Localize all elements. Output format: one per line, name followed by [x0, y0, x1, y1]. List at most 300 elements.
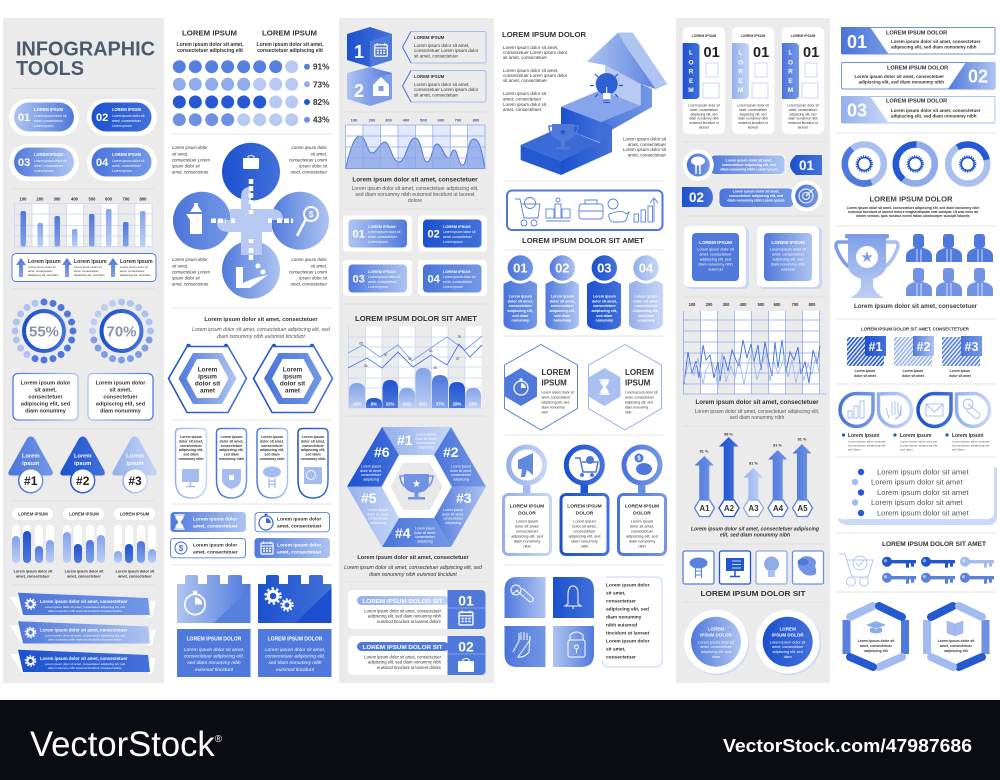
callouts: LOREM IPSUM	[414, 35, 445, 40]
circle text badges: Lorem ipsum dolor sit	[770, 640, 805, 644]
four circle process diagram: sit amet,	[172, 152, 188, 156]
segmented hexagons: amet, consectetuer	[940, 644, 973, 648]
bullet legend	[842, 433, 990, 452]
bullet list card: Lorem ipsum dolor sit amet	[877, 508, 969, 518]
panel: column 5 background	[676, 18, 830, 683]
mini bar charts: amet, consectetuer	[16, 574, 50, 578]
small label pills: Lorem ipsum dolor	[277, 542, 321, 548]
circle text badges: diam	[784, 655, 792, 659]
circle text badges	[684, 610, 821, 675]
angled banners: adipiscing elit, sed diam nonummy nibh	[891, 114, 977, 118]
hexagon six step diagram: #6	[374, 444, 390, 460]
numbered list cards: 02	[458, 638, 474, 654]
numbered cylinders: consectetuer	[593, 304, 616, 308]
bullet legend: Lorem ipsum	[952, 433, 984, 439]
small label pills: $	[179, 544, 184, 553]
title	[16, 38, 155, 80]
circle text badges: amet, consectetuer	[772, 645, 804, 649]
quad icon tiles and text: sit amet,	[606, 646, 626, 652]
small label pills: amet, consectetuer	[277, 550, 322, 556]
chart caption: dolore	[408, 198, 422, 204]
triangles with rank badges: Lorem	[126, 454, 144, 460]
bar chart: 400	[71, 196, 79, 202]
combo bar and line chart: 37%	[436, 402, 444, 406]
mini bar charts: amet, consectetuer	[118, 574, 152, 578]
arrow legend box: adipiscing elit, sed diam	[28, 273, 59, 277]
hexagon six step diagram	[347, 427, 486, 547]
callouts: Lorem ipsum dolor sit amet,	[414, 43, 470, 48]
numbered cylinders: nonummy	[637, 319, 656, 323]
heading pair: LOREM IPSUM	[262, 28, 317, 38]
ribbon banners	[10, 593, 156, 674]
text cards: Lorem ipsum dolor	[96, 380, 146, 386]
inset cards: euismod	[781, 268, 795, 272]
arrow legend box: amet, consectetuer	[28, 269, 53, 273]
four circle process diagram: Lorem ipsum dolor	[172, 145, 208, 150]
numbered cards: Lorem ipsum dolor sit	[443, 275, 475, 279]
arrow legend box: Lorem ipsum dolor sit	[120, 265, 148, 269]
hexagon feature cards: IPSUM	[542, 378, 567, 388]
text cards: sit amet,	[109, 388, 132, 394]
bar chart: 800	[140, 196, 147, 202]
icon: trophy	[549, 124, 578, 150]
isometric stairs with arrow	[521, 33, 667, 175]
four circle process diagram: consectetuer Lorem	[172, 158, 210, 162]
heading and notes: Lorem ipsum dolor sit	[623, 147, 667, 152]
numbered pills: 02	[96, 112, 108, 124]
four circle process diagram: ipsum dolor sit	[299, 276, 328, 280]
numbered pills: amet, consectetuer	[34, 164, 64, 168]
hexagon labels: ipsum	[283, 374, 302, 380]
numbered cylinders: consectetuer	[551, 304, 574, 308]
arrow chart caption	[691, 526, 820, 538]
combo bar and line chart: 65	[359, 342, 363, 346]
hexagon feature cards: amet, consectetuer	[542, 396, 571, 400]
hexagon six step diagram: Lorem ipsum	[416, 432, 436, 436]
heading and notes: Lorem ipsum dolor sit amet,	[503, 45, 559, 50]
panel: column 6	[836, 27, 997, 667]
numbered cylinders: Lorem ipsum	[509, 294, 533, 298]
ribbon banners: Lorem ipsum dolor sit amet, consectetuer	[40, 628, 128, 632]
numbered pills: Lorem ipsum dolor sit	[112, 114, 144, 118]
hexagon caption: diam nonummy nibh euismod tincidunt	[369, 572, 457, 578]
hexagon six step diagram: consectetuer	[368, 516, 389, 520]
block cards: sed diam nonummy nibh	[268, 660, 322, 666]
numbered cards: Lorem ipsum dolor sit	[368, 230, 400, 234]
circle text badges: Lorem ipsum dolor sit	[698, 640, 734, 644]
bullet legend: sed diam	[848, 448, 861, 452]
bar chart	[14, 196, 152, 246]
panel: column 1 background	[3, 18, 164, 683]
callouts: sit amet, consectetuer	[414, 92, 459, 98]
pin cards: nibh	[523, 544, 531, 548]
triangles with rank badges: ipsum	[74, 461, 91, 467]
numbered pills: amet, consectetuer	[112, 119, 142, 123]
shield cards: nonummy nibh	[178, 457, 204, 461]
pin cards: Lorem ipsum	[631, 518, 653, 524]
donut 55%: 55%	[29, 324, 59, 340]
hexagon six step diagram: dolor sit amet,	[360, 469, 382, 473]
combo bar and line chart: 57	[456, 357, 460, 361]
hexagon feature cards: Lorem ipsum dolor sit	[625, 390, 657, 394]
hexagon six step diagram: #5	[361, 490, 377, 506]
pin cards: adipiscing elit, sed	[511, 534, 543, 538]
volatile line chart: 300	[723, 302, 730, 307]
vertical tab cards: L	[739, 50, 743, 56]
horizontal tabs with round icons: diam nonummy nibh Lorem ipsum	[727, 198, 785, 202]
arrow bar chart: A4	[773, 504, 784, 513]
ribbon banners: diam nonummy nibh euismod tincidunt ut laoreet dolore	[48, 638, 122, 642]
numbered pills: amet, consectetuer	[34, 119, 64, 123]
heading and notes: amet, consectetuer	[503, 107, 542, 112]
bullet legend: Lorem ipsum	[900, 433, 932, 439]
footer watermark bar	[0, 700, 1000, 780]
numbered cylinders: 01	[513, 261, 528, 276]
circle text badges: IPSUM DOLOR	[700, 632, 733, 638]
vertical tab cards: euismod tincidunt ut	[738, 121, 768, 125]
arrow bar chart: A2	[724, 504, 735, 513]
callouts: Lorem ipsum dolor sit amet,	[414, 82, 470, 87]
horizontal tabs with round icons	[682, 150, 822, 212]
heading and notes: LOREM IPSUM DOLOR	[502, 30, 587, 39]
shield cards: dolor sit amet,	[179, 439, 203, 443]
pin cards: consectetuer	[516, 528, 539, 534]
panel: column 1	[8, 38, 157, 674]
arrow legend box: Lorem ipsum	[120, 259, 153, 265]
numbered cards: amet, consectetuer	[443, 235, 473, 239]
hexagon caption: Lorem ipsum dolor sit amet, consectetuer	[357, 555, 469, 561]
text cards	[13, 374, 153, 420]
gear rings	[839, 137, 994, 191]
vertical tab cards: laoreet	[699, 126, 709, 130]
heading pair: Lorem ipsum dolor sit amet,	[177, 42, 244, 48]
hexagon feature cards: adipiscing elit, sed	[625, 400, 653, 404]
hexagon six step diagram: dolor sit amet,	[450, 469, 472, 473]
area chart: 100	[351, 118, 358, 122]
hexagon feature cards: Lorem ipsum dolor sit	[542, 390, 574, 394]
small label pills	[170, 512, 330, 558]
numbered cards: 02	[428, 228, 440, 240]
angled banners: Lorem ipsum dolor sit amet, consectetuer	[891, 39, 981, 44]
vertical tab cards: L	[689, 50, 693, 56]
circle text badges: adipiscing elit, sed	[773, 650, 803, 654]
arrow bar chart: 81 %	[749, 462, 758, 466]
numbered cylinders: Lorem ipsum	[634, 294, 658, 298]
segmented hexagons: Lorem ipsum dolor sit	[938, 639, 975, 643]
four circle process diagram: ipsum dolor sit	[299, 164, 328, 168]
people grid	[906, 234, 993, 296]
area chart: 800	[473, 118, 480, 122]
numbered cylinders: 02	[555, 261, 570, 276]
bullet legend: consectetuer adipiscing elit,	[848, 444, 886, 448]
combo bar and line chart: 8%	[371, 402, 377, 406]
percent dot matrix: 91%	[313, 63, 330, 72]
circle text badges: LOREM	[708, 626, 724, 632]
vertical tab cards: E	[689, 78, 694, 85]
numbered list cards: euismod tincidunt ut laoreet dolore	[377, 665, 442, 670]
vertical tab cards: amet, consectetuer	[789, 108, 818, 112]
angled banners	[841, 27, 995, 123]
small label pills: amet, consectetuer	[193, 524, 238, 530]
hexagon feature cards: IPSUM	[625, 378, 651, 388]
hexagon labels	[168, 344, 332, 412]
numbered list cards: Lorem ipsum dolor sit amet, consectetuer	[364, 654, 442, 660]
numbered cylinders: adipiscing elit,	[549, 309, 575, 313]
hexagon feature cards: LOREM	[625, 368, 654, 377]
numbered cylinders: consectetuer	[635, 304, 658, 308]
mini bar charts: LOREM IPSUM	[18, 512, 48, 516]
angled banners: LOREM IPSUM DOLOR	[886, 98, 947, 104]
arrow legend box: Lorem ipsum dolor sit	[74, 265, 102, 269]
numbered pills: LOREM IPSUM	[112, 152, 141, 157]
heading and notes: sit amet, consectetuer	[503, 78, 548, 83]
bullet list card	[838, 467, 997, 525]
combo bar and line chart: 24%	[469, 402, 477, 406]
trophy: ★	[860, 249, 874, 266]
vertical tab cards: diam nonummy nibh	[788, 117, 818, 121]
hexagon six step diagram: Lorem ipsum	[368, 508, 388, 512]
triangles with rank badges: ipsum	[22, 461, 39, 467]
bar chart: 700	[122, 196, 130, 202]
heading and notes: Lorem ipsum dolor sit	[503, 102, 547, 107]
area chart: 400	[403, 118, 410, 122]
hexagon labels: Lorem	[283, 366, 303, 374]
numbered cards: LOREM IPSUM	[368, 269, 395, 274]
pin cards: consectetuer	[631, 528, 654, 534]
text cards: sit amet,	[34, 388, 57, 394]
numbered cylinders: Lorem ipsum	[551, 294, 575, 298]
heading pair: consectetuer adipiscing elit	[177, 48, 243, 54]
block cards: LOREM IPSUM DOLOR	[187, 636, 242, 642]
percent dot matrix: 82%	[313, 98, 330, 107]
four circle process diagram: sit amet,	[172, 264, 188, 268]
block cards: consectetuer adipiscing elit,	[184, 654, 244, 660]
numbered cylinders: dolor sit amet,	[508, 299, 533, 303]
four circle process diagram: ipsum dolor sit	[172, 164, 201, 168]
four circle process diagram: consectetuer Lorem	[289, 158, 327, 162]
vertical tab cards: 01	[704, 45, 720, 61]
shield cards: dolor sit amet,	[260, 439, 284, 443]
numbered cylinders: nonummy	[553, 319, 572, 323]
numbered list cards: 01	[458, 592, 474, 608]
numbered pills: Lorem ipsum dolor sit	[34, 159, 66, 163]
chart caption	[352, 176, 478, 204]
line chart caption: sed diam nonummy nibh	[730, 415, 784, 421]
horizontal tabs with round icons: Lorem ipsum dolor sit amet,	[733, 190, 779, 194]
hexagon feature cards: adipiscing elit, sed	[542, 400, 569, 404]
bullet legend: Lorem ipsum dolor sit amet,	[952, 440, 990, 444]
hatch rank badges: dolor sit amet	[854, 374, 877, 378]
vertical tab cards: E	[738, 78, 743, 85]
block cards	[177, 575, 332, 677]
numbered cylinders: 03	[597, 261, 612, 276]
hexagon six step diagram: dolor sit amet,	[367, 512, 389, 516]
area chart: 300	[385, 118, 393, 122]
numbered pills: 04	[96, 157, 109, 169]
block cards: Lorem ipsum dolor sit amet,	[184, 647, 244, 653]
circle text badges: amet, consectetuer	[700, 645, 732, 649]
circle text badges: adipiscing elit, sed	[701, 650, 731, 654]
circle text badges: LOREM	[780, 626, 796, 632]
vertical tab cards: LOREM IPSUM	[741, 34, 765, 38]
text cards: consectetuer	[28, 394, 63, 400]
numbered cylinders	[504, 252, 663, 330]
four circle process diagram: sit amet,	[311, 264, 327, 268]
combo bar and line chart: 32%	[386, 402, 394, 406]
icon strip	[507, 190, 662, 230]
vertical tab cards: 01	[803, 45, 819, 61]
title: INFOGRAPHIC	[16, 38, 155, 60]
hexagon labels: dolor sit	[280, 380, 306, 388]
combo chart heading: LOREM IPSUM DOLOR SIT AMET	[355, 314, 478, 323]
arrow legend box: Lorem ipsum dolor sit	[28, 265, 56, 269]
shield cards: sed diam	[224, 453, 239, 457]
hexagon six step diagram: adipiscing	[417, 539, 433, 543]
hexagon six step diagram: adipiscing	[363, 477, 379, 481]
bullet list card: Lorem ipsum dolor sit amet	[871, 498, 963, 507]
numbered cylinders: sed diam	[638, 314, 655, 318]
quad icon tiles and text: adipiscing elit, sed	[606, 606, 649, 612]
hexagon feature cards: diam nonummy	[625, 406, 648, 410]
shield cards: consectetuer	[180, 444, 203, 448]
inset cards: euismod	[708, 268, 723, 272]
shield cards: adipiscing elit,	[301, 448, 325, 452]
heading pair: consectetuer adipiscing elit	[257, 48, 323, 54]
bullet list card: Lorem ipsum dolor sit amet	[877, 468, 969, 476]
block cards: sed diam nonummy nibh	[187, 660, 241, 666]
numbered cards: 03	[352, 274, 365, 286]
combo bar and line chart: 75	[457, 335, 461, 339]
vertical tab cards: adipiscing elit, sed	[790, 112, 817, 116]
ribbon banners: diam nonummy nibh euismod tincidunt ut laoreet dolore	[48, 666, 122, 670]
shield cards: Lorem ipsum	[261, 435, 283, 439]
shield cards: consectetuer	[221, 444, 243, 448]
hatch rank badges: #1	[869, 340, 882, 354]
chart caption: Lorem ipsum dolor sit amet, consectetuer	[352, 176, 478, 184]
shield cards: sed diam	[264, 453, 280, 457]
numbered cylinders: adipiscing elit,	[591, 309, 617, 313]
inset cards: diam nonummy nibh	[698, 262, 733, 266]
hexagon six step diagram: #4	[395, 525, 411, 541]
inset cards: adipiscing elit, sed	[700, 258, 731, 262]
heading and notes: consectetuer Lorem ipsum dolor	[503, 73, 568, 78]
four circle process diagram: consectetuer Lorem	[172, 270, 210, 274]
angled banners: LOREM IPSUM DOLOR	[886, 30, 947, 36]
hexagon six step diagram: Lorem ipsum	[443, 508, 463, 512]
volatile line chart: 500	[758, 302, 765, 307]
hexagon six step diagram: #2	[443, 444, 459, 460]
ribbon banners: Lorem ipsum dolor sit amet, consectetuer	[40, 656, 128, 661]
vertical tab cards: M	[738, 87, 743, 94]
hexagon six step diagram: adipiscing	[453, 477, 469, 481]
callouts: consectetuer Lorem ipsum dolor	[414, 48, 479, 53]
panel: column 4	[502, 30, 667, 667]
arrow bar chart: 81 %	[700, 450, 709, 454]
arrow bar chart: A5	[797, 504, 808, 513]
numbered pills: Lorem ipsum	[34, 124, 54, 128]
bar chart: 600	[105, 196, 113, 202]
shield cards: sed diam	[305, 453, 321, 457]
line chart caption	[695, 399, 819, 421]
horizontal tabs with round icons: 02	[689, 190, 704, 205]
vertical tab cards: LOREM IPSUM	[692, 34, 716, 38]
quad icon tiles and text	[504, 577, 662, 667]
bullet legend: consectetuer adipiscing elit,	[900, 444, 938, 448]
inset cards: adipiscing elit, sed	[772, 258, 804, 262]
block cards: Lorem ipsum dolor sit amet,	[265, 647, 325, 653]
vertical tab cards: Lorem ipsum dolor sit	[787, 104, 819, 108]
arrow bar chart: 81 %	[798, 438, 807, 442]
shield cards: sed diam	[183, 453, 199, 457]
vertical tab cards: laoreet	[798, 126, 808, 130]
text cards: adipiscing elit, sed	[96, 402, 145, 408]
shield cards: adipiscing elit,	[219, 448, 244, 452]
hexagon labels: amet	[200, 388, 216, 394]
angled banners: 01	[847, 32, 867, 52]
four circle process diagram: $	[309, 210, 314, 219]
hexagon caption: Lorem ipsum dolor sit amet, consectetuer adipiscing elit, sed	[344, 565, 482, 571]
pin cards: DOLOR	[518, 510, 536, 516]
numbered cards: Lorem ipsum	[443, 240, 463, 244]
numbered cards: amet, consectetuer	[368, 280, 398, 284]
section caption: diam nonummy nibh euismod tincidunt	[217, 334, 305, 340]
triangles with rank badges	[8, 436, 157, 493]
bullet legend: sed diam	[900, 448, 913, 452]
angled banners: 02	[968, 66, 988, 86]
percent dot matrix: 73%	[313, 80, 330, 89]
shield cards: nonummy nibh	[300, 457, 326, 461]
footer watermark bar: VectorStock.com/47987686	[723, 735, 972, 756]
numbered pills: Lorem ipsum dolor sit	[112, 159, 144, 163]
vertical tab cards: adipiscing elit, sed	[691, 112, 718, 116]
hexagon six step diagram: #3	[456, 490, 472, 506]
four circle process diagram: amet, consectetuer	[172, 282, 209, 286]
footer watermark bar: ®	[215, 734, 223, 745]
numbered cylinders: adipiscing elit,	[633, 309, 659, 313]
bullet legend: Lorem ipsum dolor sit amet,	[900, 440, 938, 444]
rings caption: euismod tincidunt ut laoreet dolore magna aliquam erat volutpat. Ut wisi enim ad	[848, 210, 978, 214]
arrow legend box: adipiscing elit, sed diam	[74, 273, 105, 277]
donut 70%	[89, 298, 154, 364]
numbered cards	[343, 216, 487, 296]
hexagon feature cards: diam nonummy	[542, 406, 565, 410]
shield cards: adipiscing elit,	[260, 448, 284, 452]
section heading: LOREM IPSUM DOLOR SIT	[700, 589, 806, 598]
percent dot matrix	[173, 60, 330, 126]
ribbon banners: Lorem ipsum dolor sit amet, consectetuer adipiscing elit, sed	[45, 634, 126, 638]
hexagon six step diagram: consectetuer	[416, 441, 437, 445]
numbered cylinders: sed diam	[512, 314, 529, 318]
numbered cylinders: nonummy	[511, 319, 530, 323]
vertical tab cards: R	[738, 68, 743, 76]
panel: column 2	[168, 28, 332, 677]
shield cards: dolor sit amet,	[220, 439, 243, 443]
hexagon six step diagram: dolor sit amet,	[442, 512, 464, 516]
hexagon six step diagram: adipiscing	[418, 445, 434, 449]
cube icons	[347, 27, 392, 106]
numbered cylinders: dolor sit amet,	[592, 299, 617, 303]
heading and notes	[502, 30, 667, 158]
bullet list card: Lorem ipsum dolor sit amet	[871, 478, 963, 486]
four circle process diagram: amet, consectetuer	[172, 170, 209, 174]
small label pills: Lorem ipsum dolor	[277, 516, 321, 522]
rings caption: LOREM IPSUM DOLOR	[869, 194, 953, 204]
combo bar and line chart	[348, 326, 482, 408]
numbered cards: Lorem ipsum	[368, 285, 388, 289]
percent dot matrix: 43%	[313, 116, 330, 125]
arrow bar chart: 81 %	[773, 444, 782, 448]
vertical tab cards: O	[688, 60, 694, 66]
